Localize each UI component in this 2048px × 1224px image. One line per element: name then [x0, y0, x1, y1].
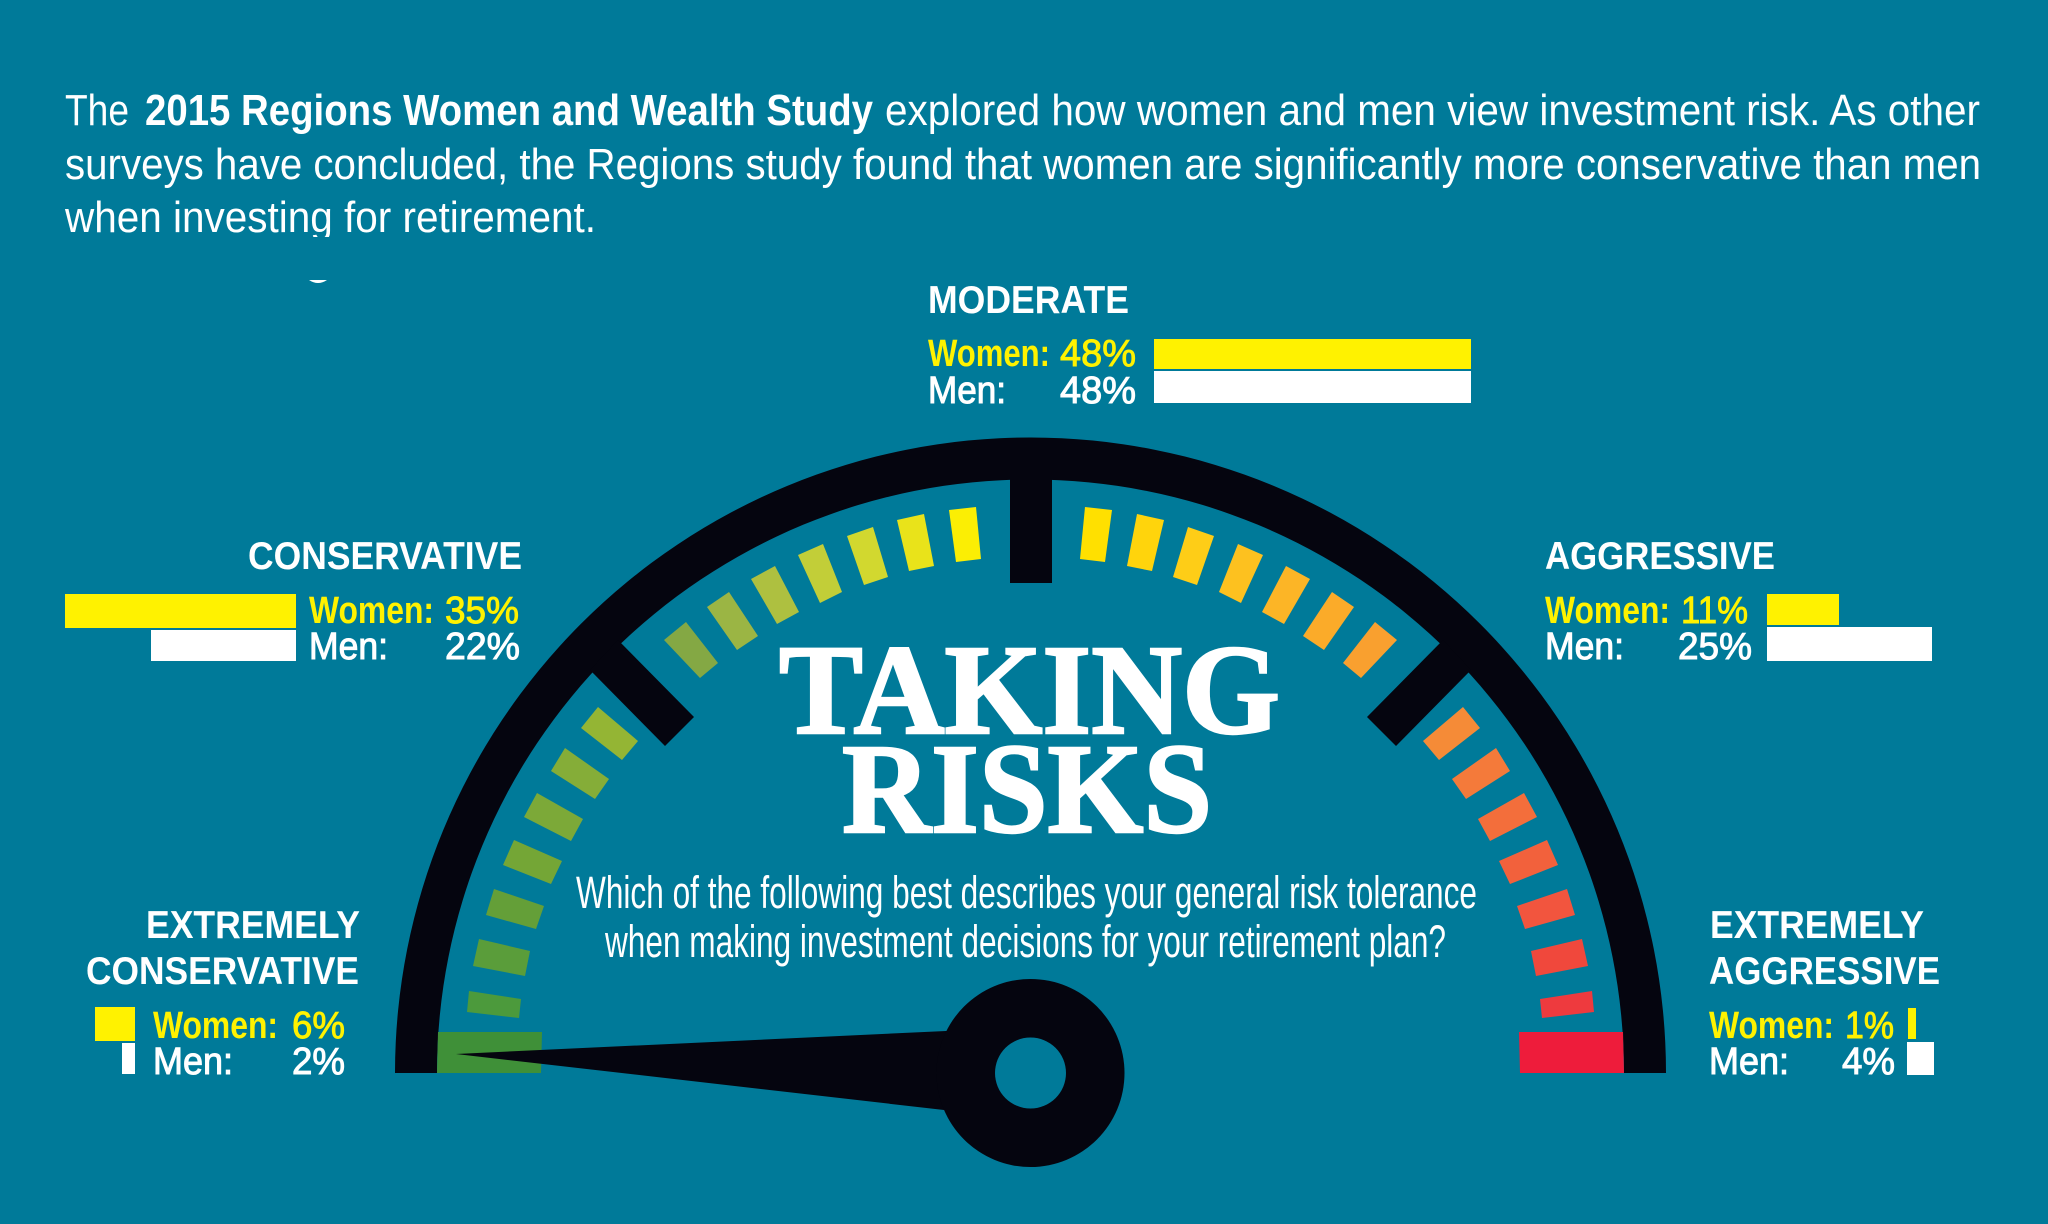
panel: conservative: Men: — [309, 626, 388, 668]
intro text block: The — [65, 86, 129, 135]
panel: aggressive: AGGRESSIVE — [1545, 535, 1775, 578]
survey question — [576, 867, 1477, 967]
panel: extremely aggressive: 4% — [1842, 1041, 1895, 1083]
intro text block: 2015 Regions Women and Wealth Study — [145, 86, 873, 135]
panel: conservative: 35% — [445, 590, 519, 632]
intro text block — [64, 86, 1981, 283]
panel: moderate: 48% — [1060, 370, 1136, 412]
panel: aggressive: Women: — [1545, 590, 1670, 632]
panel: aggressive: 25% — [1678, 626, 1752, 668]
panel: aggressive: 11% — [1681, 590, 1748, 632]
panel: extremely aggressive: AGGRESSIVE — [1709, 950, 1940, 993]
panel: conservative: Women: — [309, 590, 434, 632]
panel: extremely conservative: CONSERVATIVE — [86, 950, 359, 993]
panel: extremely aggressive: 1% — [1845, 1005, 1894, 1047]
intro text block: explored how women and men view investment risk. As other — [885, 86, 1980, 135]
panel: extremely aggressive: Men: — [1709, 1041, 1789, 1083]
panel: extremely aggressive — [1709, 904, 1940, 1083]
title: RISKS — [842, 718, 1212, 860]
panel: extremely conservative: Men: — [153, 1041, 233, 1083]
panel: extremely conservative: EXTREMELY — [146, 904, 360, 947]
gauge arc with major ticks — [395, 438, 1666, 1073]
panel: moderate: Women: — [928, 333, 1050, 375]
panel: moderate: 48% — [1060, 333, 1136, 375]
title: TAKING — [779, 619, 1280, 761]
panel: moderate: Men: — [928, 370, 1006, 412]
panel: conservative: 22% — [445, 626, 520, 668]
panel: extremely aggressive: EXTREMELY — [1710, 904, 1924, 947]
panel: moderate: MODERATE — [928, 279, 1129, 322]
gauge segments: moderate to aggressive — [1080, 507, 1624, 1073]
panel: aggressive — [1545, 535, 1932, 668]
panel: extremely conservative: Women: — [153, 1005, 278, 1047]
gauge segments: conservative to moderate — [437, 507, 981, 1073]
title — [779, 619, 1280, 860]
panel: extremely conservative: 2% — [292, 1041, 345, 1083]
panel: extremely aggressive: Women: — [1709, 1005, 1834, 1047]
panel: extremely conservative — [86, 904, 360, 1083]
panel: extremely conservative: 6% — [292, 1005, 345, 1047]
survey question: when making investment decisions for your retirement plan? — [604, 916, 1446, 967]
panel: aggressive: Men: — [1545, 626, 1624, 668]
panel: conservative: CONSERVATIVE — [248, 535, 522, 578]
gauge needle and hub — [456, 979, 1124, 1167]
panel: conservative — [65, 535, 522, 668]
intro text block: when investing for retirement. — [64, 193, 596, 242]
panel: moderate — [928, 279, 1471, 412]
survey question: Which of the following best describes your general risk tolerance — [576, 867, 1477, 918]
